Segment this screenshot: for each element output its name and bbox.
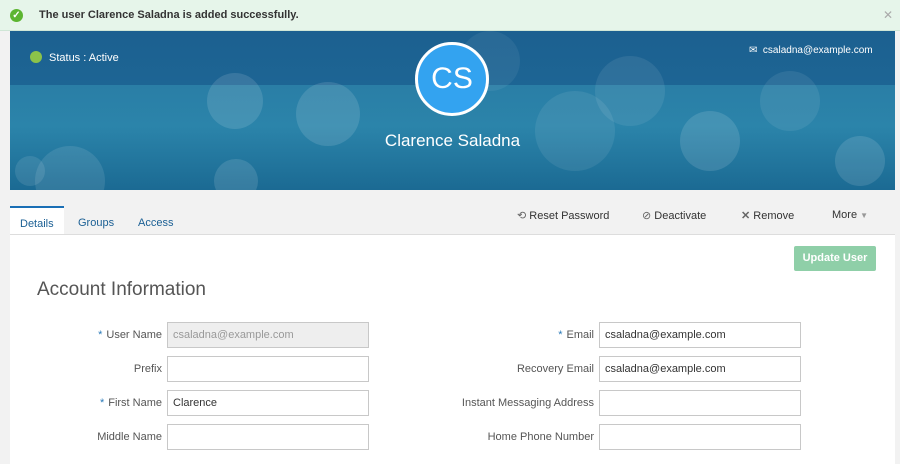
success banner: [0, 0, 900, 31]
profile header banner: Status : Active: [49, 52, 119, 64]
icon: check: ✓: [12, 10, 21, 21]
icon: check: [10, 9, 23, 22]
form right column: * Email: [558, 329, 594, 341]
form right column: [462, 322, 801, 450]
action toolbar: ⊘ Deactivate: [642, 210, 706, 222]
profile header banner: [10, 31, 895, 190]
tabs: Access: [138, 217, 173, 229]
tabs: [10, 206, 174, 234]
form right column: csaladna@example.com: [605, 363, 726, 375]
form left column: csaladna@example.com: [173, 329, 294, 341]
form left column: * User Name: [98, 329, 162, 341]
form left column: Middle Name: [97, 431, 162, 443]
update button: Update User: [803, 252, 867, 264]
email: ✉ csaladna@example.com: [749, 45, 873, 56]
avatar: [415, 42, 489, 116]
tabs: Groups: [78, 217, 114, 229]
close icon: ✕: [883, 8, 893, 22]
content panel: [10, 234, 895, 464]
action toolbar: More ▼: [832, 209, 868, 221]
update button: [794, 246, 876, 271]
form right column: Home Phone Number: [488, 431, 594, 443]
action toolbar: ✕ Remove: [741, 210, 794, 222]
status: [30, 51, 42, 63]
form right column: Recovery Email: [517, 363, 594, 375]
action toolbar: [517, 209, 868, 222]
user name: Clarence Saladna: [385, 131, 520, 150]
form left column: Prefix: [134, 363, 162, 375]
form left column: Clarence: [173, 397, 217, 409]
section heading: Account Information: [37, 279, 206, 300]
form right column: csaladna@example.com: [605, 329, 726, 341]
action toolbar: ⟲ Reset Password: [517, 210, 609, 222]
message text: The user Clarence Saladna is added successfully.: [39, 9, 299, 21]
tabs: Details: [20, 218, 54, 230]
avatar: CS: [431, 62, 473, 95]
form left column: * First Name: [100, 397, 162, 409]
form right column: Instant Messaging Address: [462, 397, 594, 409]
form left column: [97, 322, 369, 450]
